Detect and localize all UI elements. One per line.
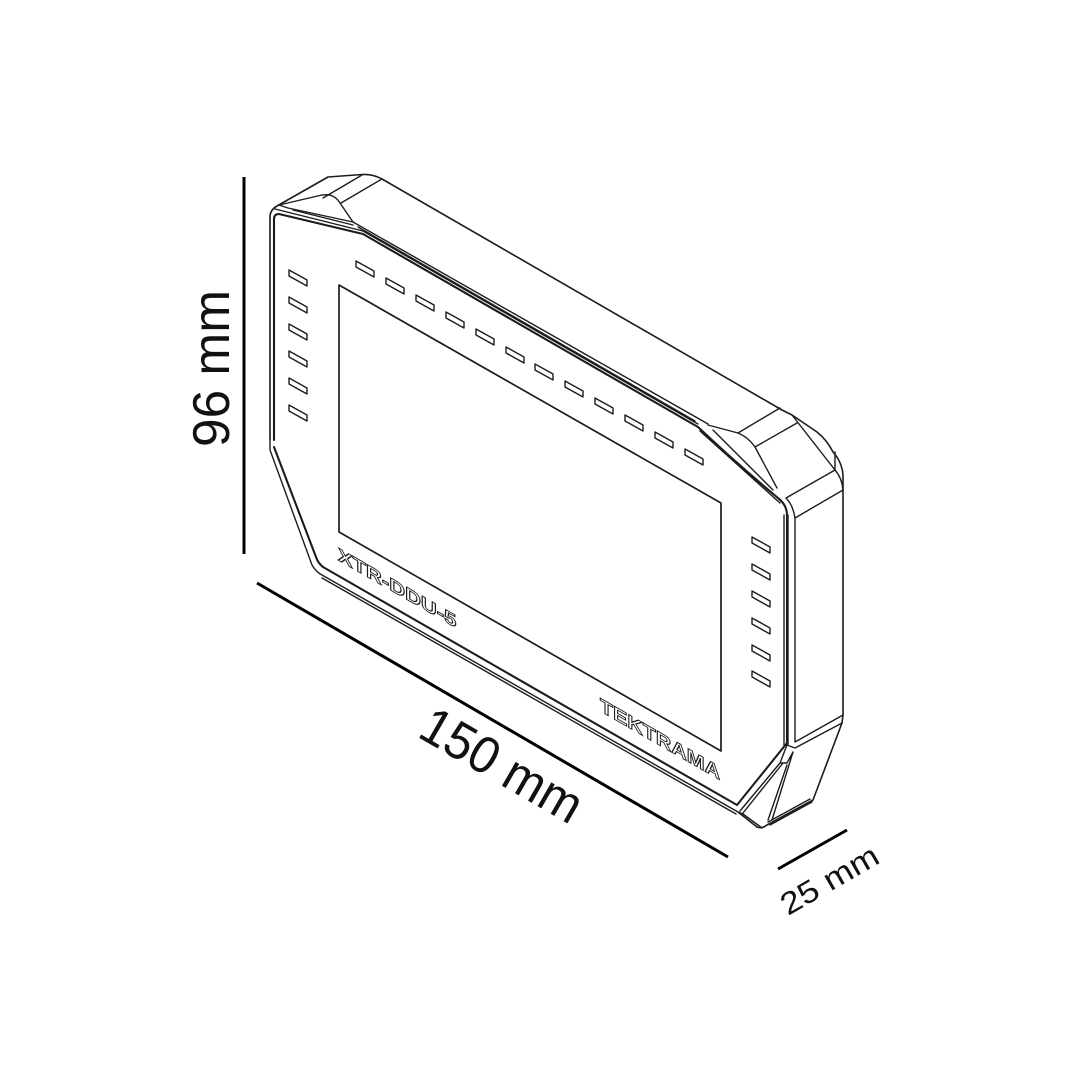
model label: XTR-DDU-5 (338, 544, 456, 632)
bottom right corner bevel (738, 745, 812, 828)
top right corner bevel (708, 408, 843, 518)
width label: 150 mm (410, 696, 593, 835)
brand label: TEKTRAMA (600, 695, 720, 785)
top LED row (356, 261, 703, 465)
width dimension line (257, 583, 728, 857)
device silhouette (270, 174, 843, 828)
top left corner bevel (279, 175, 708, 424)
front bezel outline (274, 214, 787, 805)
height label: 96 mm (183, 290, 241, 447)
left LED column (289, 270, 307, 421)
right LED column (752, 537, 770, 687)
right side panel (787, 515, 843, 748)
screen (339, 285, 721, 751)
device line drawing (270, 174, 843, 828)
depth dimension line (778, 830, 847, 869)
depth label: 25 mm (774, 838, 885, 922)
outer bezel edge (270, 209, 784, 814)
height dimension line (242, 177, 246, 554)
